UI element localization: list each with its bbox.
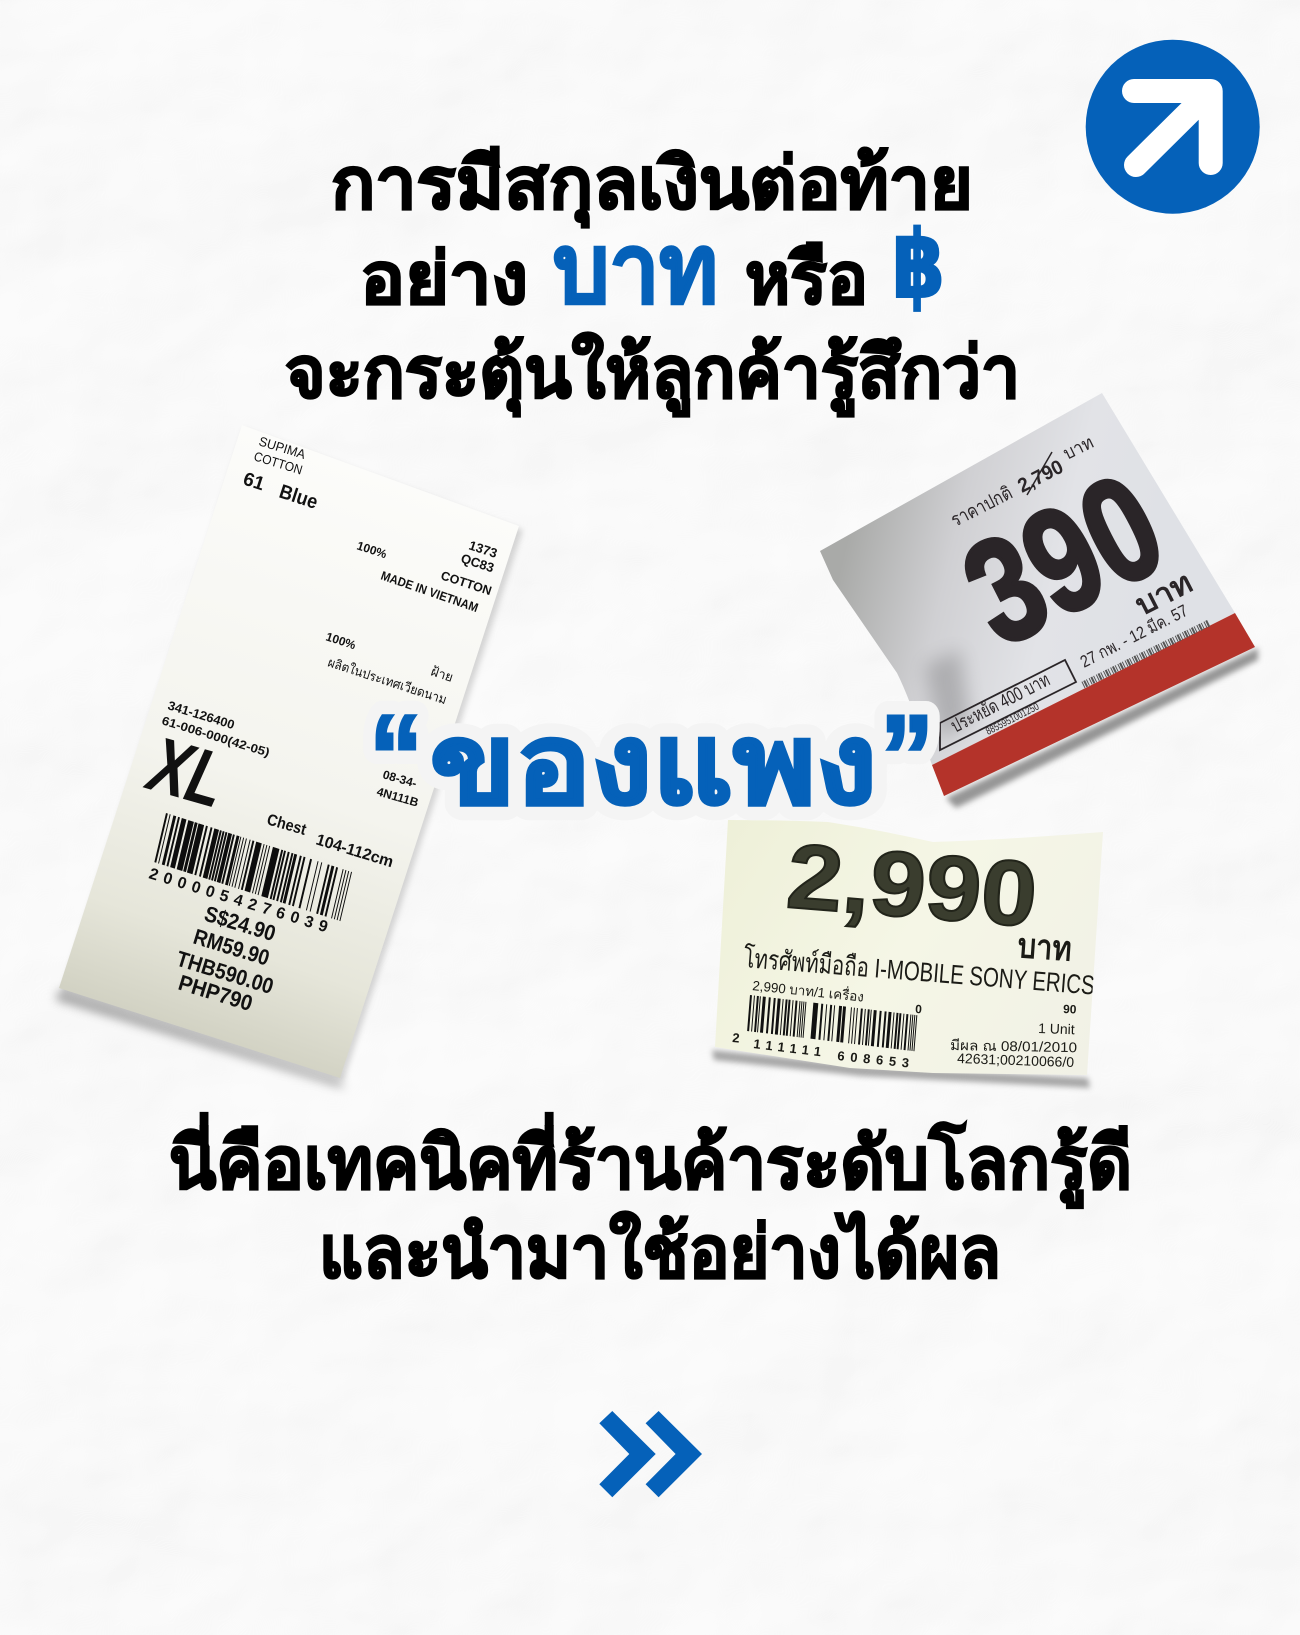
price tag: 2,990 baht (712, 820, 1103, 1088)
price tag: clothing label (56, 425, 523, 1088)
closing line 2: และนำมาใช้อย่างได้ผล (319, 1210, 1001, 1293)
price tag: 2,990 baht: 42631;00210066/0 (957, 1050, 1075, 1070)
text: barcode number and prices (147, 866, 330, 1016)
text: barcode number and prices: S$24.90 (202, 901, 279, 946)
heading: top three lines (285, 145, 1020, 417)
word outline: ” (880, 691, 934, 823)
price tag: 2,990 baht: 2,990 (783, 825, 1041, 947)
price tag: 2,990 baht: 608653 (837, 1048, 910, 1071)
price tag: clothing label: 100% (355, 539, 389, 561)
price tag: clothing label: 4N111B (375, 784, 420, 810)
price tag: clothing label: 1373 (467, 538, 499, 561)
icon: double chevron arrow (599, 1411, 702, 1497)
price tag: 2,990 baht: 0 (915, 1002, 923, 1016)
text: barcode number and prices: 2000054276039 (147, 866, 330, 936)
logo: blue circle with arrow (1086, 40, 1260, 214)
word fill (369, 691, 934, 827)
word outline: ของแพง (430, 702, 877, 827)
price tag: clothing label: XL (135, 722, 242, 823)
price tag: clothing label: 341-126400 (166, 698, 236, 732)
price tag: 390 baht: ประหยัด 400 บาท (948, 670, 1053, 737)
heading line 3: จะกระตุ้นให้ลูกค้ารู้สึกว่า (285, 331, 1020, 417)
price tag: clothing label: 100% (324, 630, 358, 652)
heading line 2: or: หรือ (745, 240, 868, 319)
text: barcode number and prices: THB590.00 (174, 946, 276, 999)
heading line 1: การมีสกุลเงินต่อท้าย (331, 145, 973, 228)
price tag: clothing label: ฝ้าย (429, 664, 455, 685)
word fill: ของแพง (430, 702, 877, 827)
text: barcode number and prices: PHP790 (176, 970, 256, 1016)
price tag: clothing label: Chest (265, 812, 309, 839)
price tag: 2,990 baht: บาท (1016, 927, 1073, 969)
price tag: clothing label: COTTON (439, 569, 493, 598)
word fill: ” (880, 691, 934, 823)
heading line 2: blue baht word: บาท (553, 216, 718, 323)
barcode: clothing label (160, 838, 346, 897)
price tag: 390 baht: บาท (1060, 432, 1097, 464)
price tag: 390 baht: 8855951001250 (984, 701, 1041, 738)
price tag: clothing label: SUPIMA (257, 434, 308, 462)
price tag: clothing label: MADE IN VIETNAM (379, 569, 480, 615)
price tag: clothing label: 61-006-000(42-05) (160, 713, 271, 760)
closing text (169, 1112, 1132, 1293)
text: barcode number and prices: RM59.90 (191, 924, 272, 971)
price tag: 390 baht (820, 393, 1258, 808)
heading line 2: word one: อย่าง (360, 240, 528, 319)
price tag: 2,990 baht: 1 Unit (1038, 1020, 1075, 1037)
closing line 1: นี่คือเทคนิคที่ร้านค้าระดับโลกรู้ดี (169, 1112, 1132, 1209)
price tag: 2,990 baht: 2 (732, 1030, 740, 1046)
price tag: 390 baht: 390 (940, 442, 1187, 678)
price tag: 390 baht: 27 กพ. - 12 มีค. 57 (1077, 601, 1191, 672)
price tag: 2,990 baht: มีผล ณ 08/01/2010 (950, 1037, 1077, 1055)
price tag: clothing label: 104-112cm (314, 832, 395, 871)
price tag: 2,990 baht: 2,990 บาท/1 เครื่อง (752, 976, 865, 1005)
price tag: clothing label: 61 (240, 469, 267, 495)
price tag: clothing label: Blue (276, 481, 320, 514)
price tag: clothing label: QC83 (459, 551, 496, 575)
price tag: clothing label: COTTON (252, 449, 304, 477)
word outline: “ (369, 691, 423, 823)
price tag: 2,990 baht: โทรศัพท์มือถือ I-MOBILE SONY ERICS (743, 942, 1096, 1001)
word outline (369, 691, 934, 827)
price tag: 390 baht: 2,790 (1014, 456, 1067, 497)
barcode: 2,990 tag (749, 1013, 919, 1034)
price tag: 390 baht: บาท (1130, 566, 1198, 622)
word fill: “ (369, 691, 423, 823)
price tag: clothing label: ผลิตในประเทศเวียดนาม (326, 655, 449, 707)
price tag: 2,990 baht: 90 (1063, 1002, 1077, 1016)
price tag: clothing label: 08-34- (381, 767, 418, 790)
highlighted word: expensive (369, 691, 934, 827)
price tag: 390 baht: ราคาปกติ (948, 483, 1016, 531)
price tag: 2,990 baht: 111111 (753, 1036, 822, 1059)
heading line 2: baht symbol: ฿ (892, 212, 945, 317)
